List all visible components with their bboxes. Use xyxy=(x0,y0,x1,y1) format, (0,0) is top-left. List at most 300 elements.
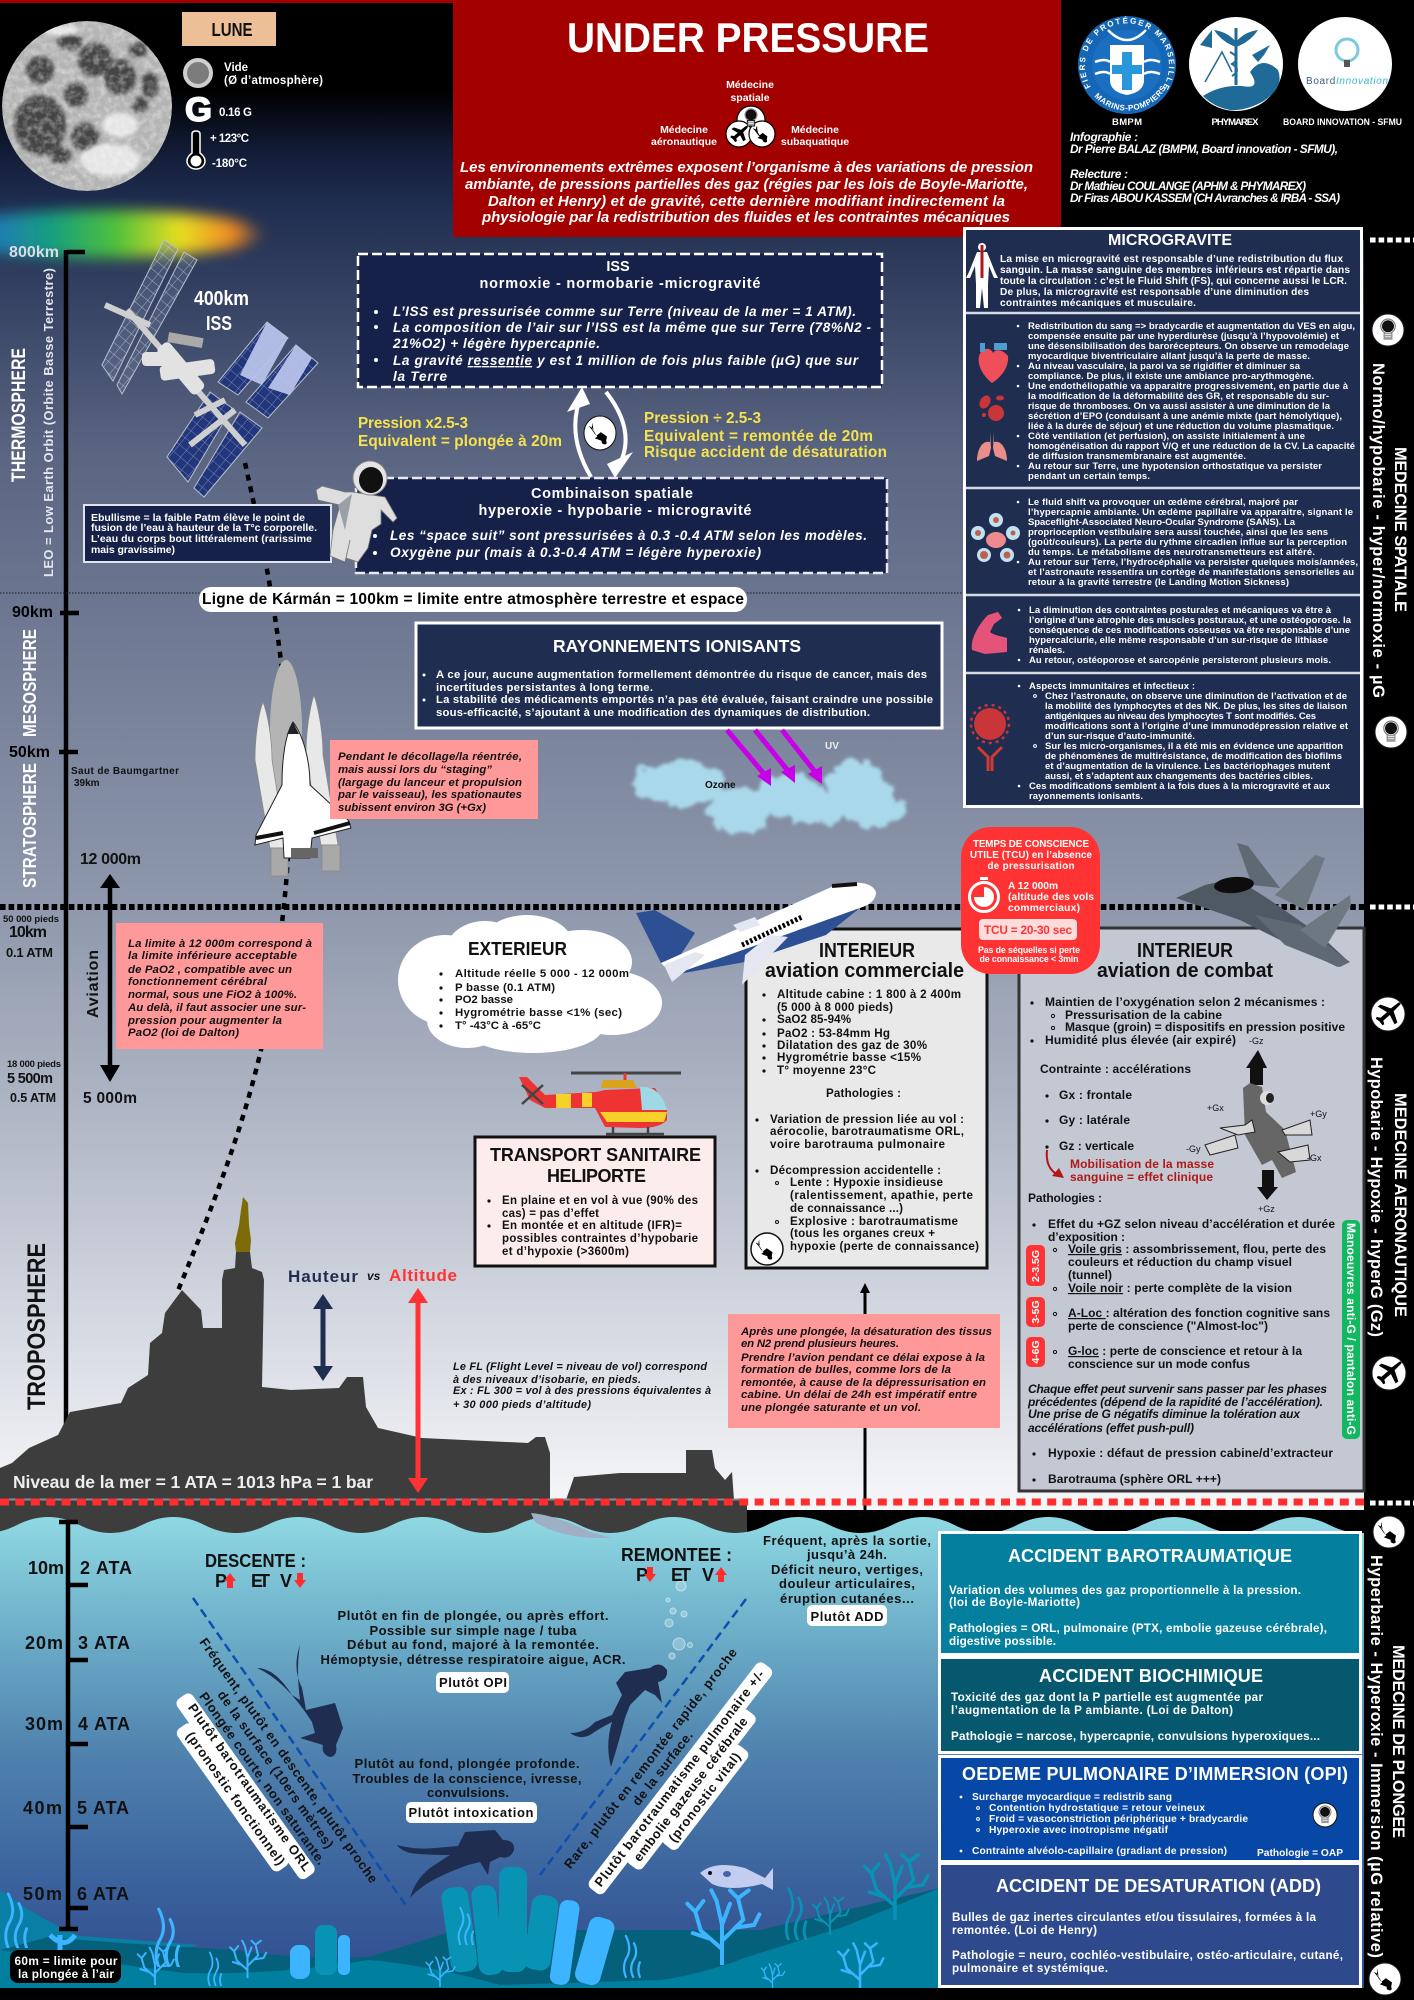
acceleration list xyxy=(1040,1062,1191,1153)
flight after dive callout: remontée, à cause de la dépressurisation en xyxy=(741,1377,986,1389)
space suit box xyxy=(356,478,887,573)
commercial conditions: PaO2 : 53-84mm Hg xyxy=(777,1027,890,1040)
acceleration list: Gy : latérale xyxy=(1059,1113,1130,1127)
musculo text xyxy=(1018,605,1352,666)
oxygenation list: Masque (groin) = dispositifs en pression positive xyxy=(1065,1020,1345,1034)
logo: Board Innovation xyxy=(1298,17,1392,111)
fish lavender xyxy=(700,1865,773,1890)
intoxication text: convulsions. xyxy=(427,1785,509,1800)
icon: stopwatch xyxy=(970,877,998,912)
barotrauma text: (loi de Boyle-Mariotte) xyxy=(949,1596,1080,1609)
ascent P and V: ET xyxy=(671,1565,691,1585)
musculo text: La diminution des contraintes posturales et mécaniques va être à xyxy=(1029,605,1332,616)
sea surface dashed line xyxy=(0,1500,1364,1502)
altitude arrow xyxy=(408,1288,428,1493)
commercial pathologies: (tous les organes creux + xyxy=(790,1227,935,1240)
descent heading: DESCENTE : xyxy=(205,1551,306,1571)
combat pathologies: perte de conscience ("Almost-loc") xyxy=(1068,1319,1268,1333)
descent barotrauma pill: (pronostic fonctionnel) xyxy=(183,1729,288,1868)
ISS heading: normoxie - normobarie -microgravité xyxy=(480,276,760,292)
shuttle callout: par le vaisseau), les spationautes xyxy=(337,789,522,801)
aviation callout: de PaO2 , compatible avec un xyxy=(128,964,292,976)
pilot seat G-force diagram: -Gx xyxy=(1307,1153,1322,1163)
barotrauma text: digestive possible. xyxy=(949,1635,1056,1648)
neuro text: retour à la gravité terrestre (le Landing Motion Sickness) xyxy=(1028,577,1289,588)
ADD text: jusqu’à 24h. xyxy=(806,1547,887,1562)
descent barotrauma text: de la surface (10ers mètres) xyxy=(215,1688,337,1851)
Karman label: Ligne de Kármán = 100km = limite entre atmosphère terrestre et espace xyxy=(202,591,744,608)
vs label: vs xyxy=(367,1269,381,1283)
immunity text: antigéniques au niveau des lymphocytes T sont modifiés. Ces xyxy=(1045,711,1316,722)
microgravity intro: La mise en microgravité est responsable d’une redistribution du flux xyxy=(1000,254,1343,265)
vacuum text: Vide xyxy=(224,62,248,74)
cardio text: Une endothéliopathie va apparaitre progressivement, en partie due à xyxy=(1028,381,1349,392)
rocket trajectory xyxy=(177,463,290,1293)
commercial pathologies xyxy=(755,1087,979,1253)
depth labels: 2 ATA xyxy=(80,1558,132,1578)
ascent heading xyxy=(621,1545,732,1585)
suit bullets: Les “space suit” sont pressurisées à 0.3 -0.4 ATM selon les modèles. xyxy=(390,528,867,543)
suit bullets: Oxygène pur (mais à 0.3-0.4 ATM = légère hyperoxie) xyxy=(390,545,761,560)
oxygenation list: Pressurisation de la cabine xyxy=(1065,1008,1222,1022)
radiation bullets xyxy=(422,669,933,719)
altitude labels: 800km xyxy=(9,244,59,261)
immunity text: Aspects immunitaires et infectieux : xyxy=(1029,681,1195,692)
immunity text: modifications sont à l’origine d’une immunodépression relative et xyxy=(1045,721,1349,732)
immunity text: d’un sur-risque d’auto-immunité. xyxy=(1045,731,1195,742)
shuttle callout: Pendant le décollage/la réentrée, xyxy=(338,751,522,763)
neuro text: l’hypercapnie ambiante. Un œdème papillaire va apparaitre, signant le xyxy=(1028,507,1353,518)
transport list xyxy=(487,1195,698,1258)
depth labels: 50m xyxy=(23,1884,62,1904)
microgravity intro: De plus, la microgravité est responsable d’une diminution des xyxy=(1000,287,1309,298)
OPI text: Début au fond, majoré à la remontée. xyxy=(347,1637,599,1652)
musculo text: conséquence de ces modifications osseuses va être responsable d’une xyxy=(1029,625,1350,636)
commercial pathologies: de connaissance ...) xyxy=(790,1202,903,1215)
ISS station xyxy=(102,240,318,497)
title: UNDER PRESSURE xyxy=(567,14,929,61)
hauteur arrow xyxy=(313,1294,333,1381)
ascent P and V: V xyxy=(702,1565,714,1585)
descent P and V: P xyxy=(215,1571,227,1591)
hypoxia and barotrauma: Hypoxie : défaut de pression cabine/d’extracteur xyxy=(1048,1446,1333,1460)
TCU note xyxy=(978,945,1080,964)
Karman dotted line xyxy=(0,592,963,594)
hypoxia and barotrauma: Barotrauma (sphère ORL +++) xyxy=(1048,1472,1221,1486)
lune legend xyxy=(182,12,323,170)
commercial pathologies: Explosive : barotraumatisme xyxy=(790,1215,959,1228)
transport heading xyxy=(490,1145,701,1186)
icon: arm muscle xyxy=(972,612,1007,654)
temperatures: + 123°C xyxy=(210,133,249,145)
flight level note xyxy=(453,1361,711,1411)
pilot seat G-force diagram: +Gy xyxy=(1310,1109,1327,1119)
sidebar: aviation medicine xyxy=(1367,997,1409,1390)
ascent barotrauma text: Rare, plutôt en remontée rapide, proche xyxy=(561,1645,740,1871)
LEO label: LEO = Low Earth Orbit (Orbite Basse Terrestre) xyxy=(41,268,56,577)
pilot seat G-force diagram: +Gz xyxy=(1258,1204,1275,1214)
logo: BMPM: FIERS DE PROTÉGER MARSEILLE xyxy=(1079,16,1174,90)
orbiter xyxy=(255,722,351,858)
cardio text: Au niveau vasculaire, la paroi va se rigidifier et diminuer sa xyxy=(1028,361,1301,372)
pressure right: Risque accident de désaturation xyxy=(644,444,887,461)
space medicine labels: MEDECINE SPATIALE xyxy=(1391,447,1409,612)
truss xyxy=(105,305,245,445)
sidebar: space medicine xyxy=(1369,314,1409,748)
immunity text: rayonnements ionisants. xyxy=(1029,791,1143,802)
icon: astronaut xyxy=(1375,716,1407,748)
thermosphere label: THERMOSPHERE xyxy=(9,348,30,482)
suit heading: hyperoxie - hypobarie - microgravité xyxy=(478,503,752,519)
credits: Dr Pierre BALAZ (BMPM, Board innovation - SFMU), xyxy=(1070,142,1338,156)
credits xyxy=(1070,130,1340,205)
cardio text: de diffusion transmembranaire est augmentée. xyxy=(1028,451,1246,462)
branch corals and seaweed xyxy=(6,1855,928,1990)
depth labels: 4 ATA xyxy=(78,1714,130,1734)
seabed xyxy=(0,1888,940,1990)
immunity text: et d’augmentation de la virulence. Les bactériophages mutent xyxy=(1045,761,1331,772)
logo: BMPM: MARINS-POMPIERS xyxy=(1094,86,1166,111)
ionizing radiation box xyxy=(416,623,942,728)
ebullism box: L’eau du corps bout littéralement (rarissime xyxy=(91,533,312,545)
altitude label: Altitude xyxy=(389,1266,457,1285)
flight after dive callout: cabine. Un délai de 24h est impératif entre xyxy=(741,1389,978,1401)
black right sidebar xyxy=(1364,0,1414,2000)
depth labels xyxy=(23,1558,132,1904)
pressure arrows xyxy=(567,387,633,478)
TCU value: TCU = 20-30 sec xyxy=(984,923,1072,937)
icon: heart xyxy=(979,343,1008,383)
fighter jet xyxy=(1176,843,1351,967)
barotrauma text: Pathologies = ORL, pulmonaire (PTX, embolie gazeuse cérébrale), xyxy=(949,1622,1327,1635)
commercial conditions: Altitude cabine : 1 800 à 2 400m xyxy=(777,988,961,1001)
depth labels: 3 ATA xyxy=(78,1633,130,1653)
suit bullets xyxy=(373,528,867,560)
aviation callout: Au delà, il faut associer une sur- xyxy=(127,1002,306,1014)
OPI causes: Surcharge myocardique = redistrib sang xyxy=(972,1792,1172,1803)
OPI pill xyxy=(436,1672,509,1693)
neuro text: Au retour sur Terre, l’hydrocéphalie va persister quelques mois/années, xyxy=(1028,557,1358,568)
pressure left xyxy=(358,415,562,450)
aviation altitudes: 0.5 ATM xyxy=(10,1091,56,1105)
ascent heading: REMONTEE : xyxy=(621,1545,732,1565)
icon: blood cells xyxy=(977,393,1004,421)
transport heading: TRANSPORT SANITAIRE xyxy=(490,1145,701,1165)
solar arrays lower right xyxy=(167,322,318,497)
combat pathologies: conscience sur un mode confus xyxy=(1068,1357,1250,1371)
ISS bullets: La gravité ressentie y est 1 million de fois plus faible (µG) que sur xyxy=(393,353,859,368)
cardio text: Côté ventilation (et perfusion), on assiste initialement à une xyxy=(1028,431,1305,442)
TCU heading: UTILE (TCU) en l’absence xyxy=(970,850,1093,861)
flight after dive callout xyxy=(728,1314,1000,1428)
logo captions: PHYMAREX xyxy=(1212,117,1259,128)
divers xyxy=(257,1645,667,1898)
immunity text: la mobilité des lymphocytes et des NK. De plus, les sites de liaison xyxy=(1045,701,1347,712)
diver descending xyxy=(257,1645,343,1757)
credits: Dr Mathieu COULANGE (APHM & PHYMAREX) xyxy=(1070,179,1306,193)
immunity text xyxy=(1018,681,1349,802)
cardio text: compliance. De plus, il existe une ambiance pro-arythmogène. xyxy=(1028,371,1314,382)
radiation bullets: A ce jour, aucune augmentation formellement démontrée du risque de cancer, mais des xyxy=(436,669,927,681)
neuro text: Spaceflight-Associated Neuro-Ocular Syndrome (SANS). La xyxy=(1028,517,1296,528)
ISS heading xyxy=(480,259,760,292)
aviation altitude arrow xyxy=(100,874,120,1082)
descent barotrauma text: Fréquent, plutôt en descente, plutôt proche xyxy=(197,1635,381,1886)
aviation medicine labels: Hypobarie - Hypoxie - hyperG (Gz) xyxy=(1367,1057,1385,1337)
TCU note: de connaissance < 3min xyxy=(980,954,1078,964)
combat aviation panel xyxy=(1019,928,1364,1491)
push-pull note xyxy=(1027,1382,1327,1435)
shuttle callout: subissent environ 3G (+Gx) xyxy=(338,802,486,814)
aviation callout: pression pour augmenter la xyxy=(127,1015,282,1027)
space shuttle xyxy=(255,660,351,876)
ADD description xyxy=(952,1911,1343,1975)
oxygenation list: Maintien de l’oxygénation selon 2 mécanismes : xyxy=(1045,995,1325,1009)
diving medicine labels: MEDECINE DE PLONGEE xyxy=(1389,1645,1407,1838)
oxygenation list xyxy=(1030,995,1345,1047)
altitude scale xyxy=(9,244,85,1440)
scale axis xyxy=(58,250,85,1440)
exterior list: PO2 basse xyxy=(455,994,513,1006)
aviation callout xyxy=(116,923,323,1049)
flight level note: Ex : FL 300 = vol à des pressions équivalentes à xyxy=(453,1385,711,1397)
ADD description: Bulles de gaz inertes circulantes et/ou tissulaires, formées à la xyxy=(952,1911,1316,1924)
logo: PHYMAREX xyxy=(1189,17,1283,111)
OPI causes: Contrainte alvéolo-capillaire (gradiant de pression) xyxy=(972,1846,1227,1857)
fish silver xyxy=(531,1513,612,1538)
commercial conditions: T° moyenne 23°C xyxy=(777,1064,877,1077)
sky background xyxy=(0,0,1414,1510)
aviation altitudes: 0.1 ATM xyxy=(6,945,53,960)
TCU heading xyxy=(970,839,1093,872)
aviation altitudes: 5 000m xyxy=(83,1090,137,1107)
transport list: En plaine et en vol à vue (90% des xyxy=(502,1195,698,1207)
icon: thermometer xyxy=(187,131,205,169)
golden statue xyxy=(235,1197,251,1252)
push-pull note: accélérations (effet push-pull) xyxy=(1028,1421,1194,1435)
intoxication text: Troubles de la conscience, ivresse, xyxy=(352,1771,582,1786)
ADD heading: ACCIDENT DE DESATURATION (ADD) xyxy=(996,1876,1321,1896)
TCU heading: de pressurisation xyxy=(988,861,1075,872)
plane xyxy=(636,883,876,985)
icon: lungs xyxy=(977,432,1007,461)
sea water xyxy=(0,1517,1392,1990)
aviation dashed limit xyxy=(0,904,1364,910)
depth labels: 20m xyxy=(25,1633,63,1653)
helicopter xyxy=(519,1073,681,1134)
commercial heading: aviation commerciale xyxy=(765,960,964,982)
combat heading: INTERIEUR xyxy=(1137,940,1233,962)
ADD description: pulmonaire et systémique. xyxy=(952,1962,1108,1975)
aviation altitudes: 10km xyxy=(9,924,47,941)
depth labels: 5 ATA xyxy=(77,1798,129,1818)
pressure left: Pression x2.5-3 xyxy=(358,415,468,432)
combat pathologies: G-loc : perte de conscience et retour à la xyxy=(1068,1344,1302,1358)
hypoxia and barotrauma xyxy=(1032,1446,1333,1486)
ADD pill: Plutôt ADD xyxy=(810,1609,884,1624)
Baumgartner jump xyxy=(71,766,179,789)
combat heading: aviation de combat xyxy=(1097,960,1273,982)
hauteur label: Hauteur xyxy=(288,1267,358,1286)
temperatures xyxy=(210,133,249,170)
ebullism box: fusion de l’eau à hauteur de la T°c corporelle. xyxy=(91,522,317,534)
radiation bullets: sous-efficacité, s’ajoutant à une modification des dynamiques de distribution. xyxy=(436,707,870,719)
ascent barotrauma pill: Plutôt barotraumatisme pulmonaire +/- xyxy=(591,1667,767,1889)
OPI causes: Froid = vasoconstriction périphérique + bradycardie xyxy=(989,1814,1248,1825)
mesosphere label: MESOSPHERE xyxy=(20,629,40,737)
flight level note: Le FL (Flight Level = niveau de vol) correspond xyxy=(453,1361,707,1373)
exterior cloud xyxy=(398,915,662,1053)
height vs altitude xyxy=(288,1266,457,1493)
altitude labels: 50km xyxy=(9,744,50,761)
intoxication pill: Plutôt intoxication xyxy=(408,1805,534,1820)
aviation callout: fonctionnement cérébral xyxy=(128,976,268,988)
solar arrays upper left xyxy=(102,240,197,394)
icon: virus xyxy=(971,705,1009,743)
UV label: UV xyxy=(825,741,839,752)
combat pathologies: d’exposition : xyxy=(1048,1230,1125,1244)
biochemical text: Toxicité des gaz dont la P partielle est augmentée par xyxy=(951,1691,1263,1704)
commercial conditions: Hygrométrie basse <15% xyxy=(777,1051,921,1064)
musculo text: Au retour, ostéoporose et sarcopénie persisteront plusieurs mois. xyxy=(1029,655,1331,666)
moon image xyxy=(0,20,175,195)
combat pathologies xyxy=(1028,1191,1335,1371)
lune label: LUNE xyxy=(212,20,252,40)
tube corals xyxy=(290,1867,617,1987)
shuttle callout: mais aussi lors du “staging” xyxy=(338,764,492,776)
OPI causes xyxy=(960,1792,1343,1859)
ascent barotrauma pill: (pronostic vital) xyxy=(665,1749,744,1845)
ADD text: Fréquent, après la sortie, xyxy=(763,1533,931,1548)
logo captions xyxy=(1112,117,1402,128)
descent P and V: V xyxy=(280,1571,292,1591)
cardio text: risque de thromboses. On va aussi assister à une diminution de la xyxy=(1028,401,1331,412)
icon: diver xyxy=(751,1233,783,1265)
microgravity intro: sanguin. La masse sanguine des membres inférieurs est répartie dans xyxy=(1000,265,1350,276)
flight after dive callout: formation de bulles, comme lors de la xyxy=(741,1364,951,1376)
exterior list: Altitude réelle 5 000 - 12 000m xyxy=(455,968,629,980)
credits: Infographie : xyxy=(1070,130,1138,144)
descent barotrauma text: Plongée courte, non saturante. xyxy=(196,1689,329,1868)
aviation medicine labels: MEDECINE AERONAUTIQUE xyxy=(1391,1093,1409,1317)
intro paragraph: Dalton et Henry) et de gravité, cette dernière modifiant indirectement la xyxy=(488,193,1005,210)
neuro text: (goût/couleurs). La perte du rythme circadien influe sur la perception xyxy=(1028,537,1347,548)
OPI causes: Contention hydrostatique = retour veineux xyxy=(989,1803,1205,1814)
logo captions: BOARD INNOVATION - SFMU xyxy=(1283,117,1402,128)
icon: diver in circle xyxy=(584,416,616,450)
credits: Dr Firas ABOU KASSEM (CH Avranches & IRBA - SSA) xyxy=(1070,191,1340,205)
combat pathologies: Voile gris : assombrissement, flou, perte des xyxy=(1068,1242,1326,1256)
diver deep xyxy=(397,1830,514,1898)
suit heading xyxy=(478,486,752,519)
ISS heading: ISS xyxy=(606,259,630,275)
aviation callout: la limite inférieure acceptable xyxy=(128,950,298,962)
commercial pathologies: (ralentissement, apathie, perte xyxy=(790,1189,974,1202)
ISS bullets: L’ISS est pressurisée comme sur Terre (niveau de la mer = 1 ATM). xyxy=(393,304,856,319)
icon: diver xyxy=(1373,1516,1405,1548)
neuro text: Le fluid shift va provoquer un œdème cérébral, majoré par xyxy=(1028,497,1298,508)
immunity text: Sur les micro-organismes, il a été mis en évidence une apparition xyxy=(1045,741,1343,752)
biochemical text: Pathologie = narcose, hypercapnie, convulsions hyperoxiques... xyxy=(951,1730,1320,1743)
specialty labels: Médecine xyxy=(791,124,839,136)
shuttle callout: (largage du lanceur et propulsion xyxy=(338,777,522,789)
blood mobilisation note: Mobilisation de la masse xyxy=(1070,1157,1214,1171)
altitude labels xyxy=(9,244,59,761)
neuro text xyxy=(1017,497,1358,588)
temperatures: -180°C xyxy=(212,158,247,170)
combat pathologies: (tunnel) xyxy=(1068,1268,1112,1282)
transport list: et d’hypoxie (>3600m) xyxy=(502,1246,629,1258)
OPI text: Possible sur simple nage / tuba xyxy=(370,1623,577,1638)
ISS altitude label: ISS xyxy=(206,313,232,335)
barotrauma text xyxy=(949,1584,1327,1648)
icon: senses and brain xyxy=(971,513,1020,562)
shuttle callout xyxy=(330,740,538,819)
G level badges xyxy=(1026,1245,1045,1367)
ebullism box xyxy=(84,505,331,562)
radiation bullets: La stabilité des médicaments emportés n’a pas été évaluée, faisant craindre une possible xyxy=(436,694,933,706)
G level badges: 2-3.5G xyxy=(1030,1250,1042,1282)
OPI causes: Hyperoxie avec inotropisme négatif xyxy=(989,1825,1169,1836)
intro paragraph xyxy=(460,159,1033,226)
cardio text: Redistribution du sang => bradycardie et augmentation du VES en aigu, xyxy=(1028,321,1355,332)
flight after dive callout: Prendre l’avion pendant ce délai expose à la xyxy=(741,1352,985,1364)
immunity text: Ces modifications semblent à la fois dues à la microgravité et aux xyxy=(1029,781,1331,792)
cardio text: sécrétion d’EPO (conduisant à une anémie mixte (part hémolytique), xyxy=(1028,411,1342,422)
altitude labels: 90km xyxy=(12,604,53,621)
radiation bullets: incertitudes persistantes à long terme. xyxy=(436,682,653,694)
cardio text: myocardique biventriculaire allant jusqu’à la perte de masse. xyxy=(1028,351,1310,362)
commercial heading: INTERIEUR xyxy=(819,940,915,962)
immunity text: aussi, et s’adaptent aux changements des bactéries cibles. xyxy=(1045,771,1313,782)
commercial conditions: SaO2 85-94% xyxy=(777,1013,851,1026)
aurora rainbow glow xyxy=(0,210,265,258)
musculo text: hypercalciurie, elle même responsable d’un sur-risque de lithiase xyxy=(1029,635,1328,646)
logo: Board Innovation: BoardInnovation xyxy=(1306,76,1388,87)
radiation heading: RAYONNEMENTS IONISANTS xyxy=(553,636,801,656)
aviation altitudes: 5 500m xyxy=(7,1071,53,1087)
flight after dive callout: en N2 prend plusieurs heures. xyxy=(741,1338,899,1350)
neuro text: proprioception vestibulaire sera aussi touchée, ainsi que les sens xyxy=(1028,527,1328,538)
sidebar: diving medicine xyxy=(1367,1516,1407,1995)
descent P and V xyxy=(215,1571,306,1591)
icon: three specialties xyxy=(726,106,775,147)
blood mobilisation note xyxy=(1047,1150,1214,1184)
cardio text: une désensibilisation des barorécepteurs. On observe un remodelage xyxy=(1028,341,1349,352)
boosters xyxy=(255,695,340,876)
OPI causes: Pathologie = OAP xyxy=(1257,1848,1343,1859)
black header right xyxy=(1061,0,1414,240)
icon: astronaut xyxy=(1372,314,1404,346)
ozone label: Ozone xyxy=(705,780,736,791)
aviation altitudes: 18 000 pieds xyxy=(7,1059,61,1070)
ADD text: éruption cutanées... xyxy=(780,1591,914,1606)
diving medicine labels xyxy=(1367,1555,1407,1958)
anti-G badge: Manoeuvres anti-G / pantalon anti-G xyxy=(1344,1223,1358,1435)
commercial pathologies: Variation de pression liée au vol : xyxy=(770,1113,964,1126)
ADD text xyxy=(763,1533,931,1606)
pilot seat G-force diagram: -Gz xyxy=(1249,1036,1264,1046)
combat heading xyxy=(1097,940,1273,982)
TCU altitude: commerciaux) xyxy=(1008,903,1080,914)
ascent barotrauma text: de la surface. xyxy=(629,1728,696,1808)
ADD pill xyxy=(807,1605,887,1626)
ISS altitude label: 400km xyxy=(194,288,249,310)
aviation altitudes: 12 000m xyxy=(80,851,141,868)
icon: plane xyxy=(1372,1356,1406,1390)
space medicine labels: Normo/hypobarie - hyper/normoxie - µG xyxy=(1369,363,1387,698)
TCU altitude: A 12 000m xyxy=(1008,881,1058,892)
